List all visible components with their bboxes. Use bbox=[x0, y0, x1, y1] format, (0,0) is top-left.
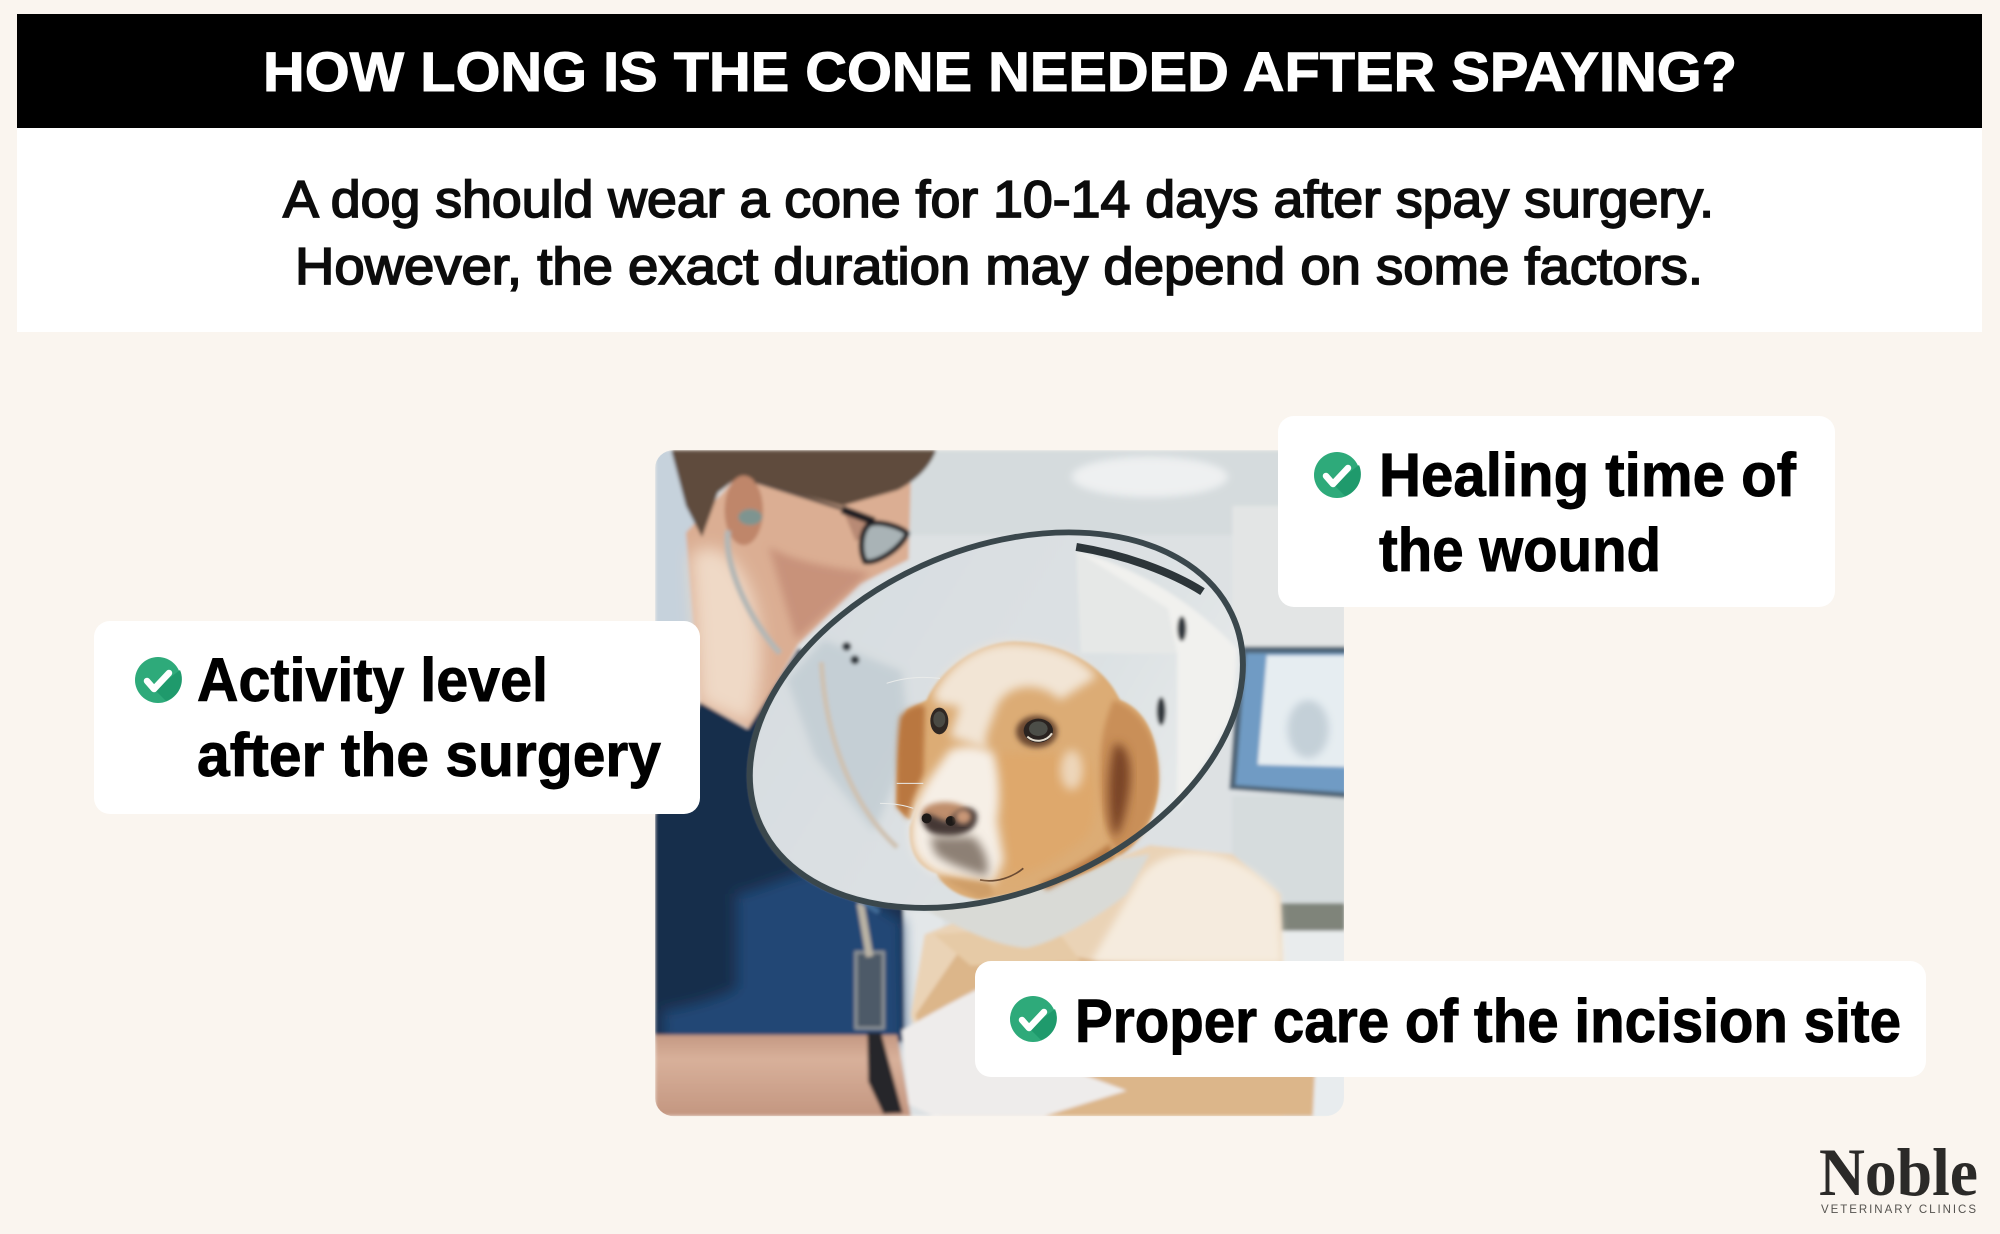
callout: activity level: after the surgery bbox=[197, 721, 661, 789]
intro text panel bbox=[17, 128, 1982, 332]
vet arm and glove bbox=[655, 988, 1127, 1116]
intro text panel: A dog should wear a cone for 10-14 days after spay surgery. bbox=[283, 171, 1714, 229]
cheek bbox=[997, 753, 1095, 877]
photo: vet with dog wearing cone bbox=[655, 450, 1347, 1117]
whiskers bbox=[880, 677, 940, 808]
intro text panel: However, the exact duration may depend on some factors. bbox=[295, 238, 1703, 296]
monitor bbox=[1229, 647, 1347, 798]
dog head bbox=[880, 642, 1158, 899]
logo: Noble Veterinary Clinics: VETERINARY CLINICS bbox=[1821, 1204, 1976, 1216]
title banner: HOW LONG IS THE CONE NEEDED AFTER SPAYING? bbox=[263, 40, 1737, 103]
nose bbox=[922, 802, 968, 825]
icon: check mark bbox=[135, 657, 182, 703]
callout: healing time: Healing time of bbox=[1379, 441, 1797, 509]
vet head and neck bbox=[671, 450, 936, 729]
ears bbox=[897, 705, 925, 820]
dog body bbox=[911, 845, 1320, 1116]
callout: healing time bbox=[1278, 416, 1835, 607]
icon: check mark bbox=[1314, 452, 1361, 498]
muzzle bbox=[911, 746, 1003, 883]
callout: proper care bbox=[975, 961, 1926, 1077]
cone rim bbox=[687, 459, 1306, 981]
cone interior bbox=[746, 552, 1240, 911]
clinic background bbox=[655, 450, 1347, 1117]
icon: check mark bbox=[1010, 996, 1057, 1042]
cone neck end bbox=[930, 854, 1150, 950]
callout: healing time: the wound bbox=[1379, 516, 1661, 584]
mouth shading bbox=[930, 837, 988, 877]
forehead bbox=[933, 643, 1097, 750]
callout: activity level bbox=[94, 621, 700, 814]
vet scrubs bbox=[655, 649, 904, 1042]
callout: activity level: Activity level bbox=[197, 646, 548, 714]
eyes bbox=[930, 708, 948, 734]
callout: proper care: Proper care of the incision site bbox=[1075, 987, 1901, 1055]
logo: Noble Veterinary Clinics: Noble bbox=[1819, 1134, 1978, 1210]
head base bbox=[897, 642, 1158, 899]
title banner bbox=[17, 14, 1982, 128]
